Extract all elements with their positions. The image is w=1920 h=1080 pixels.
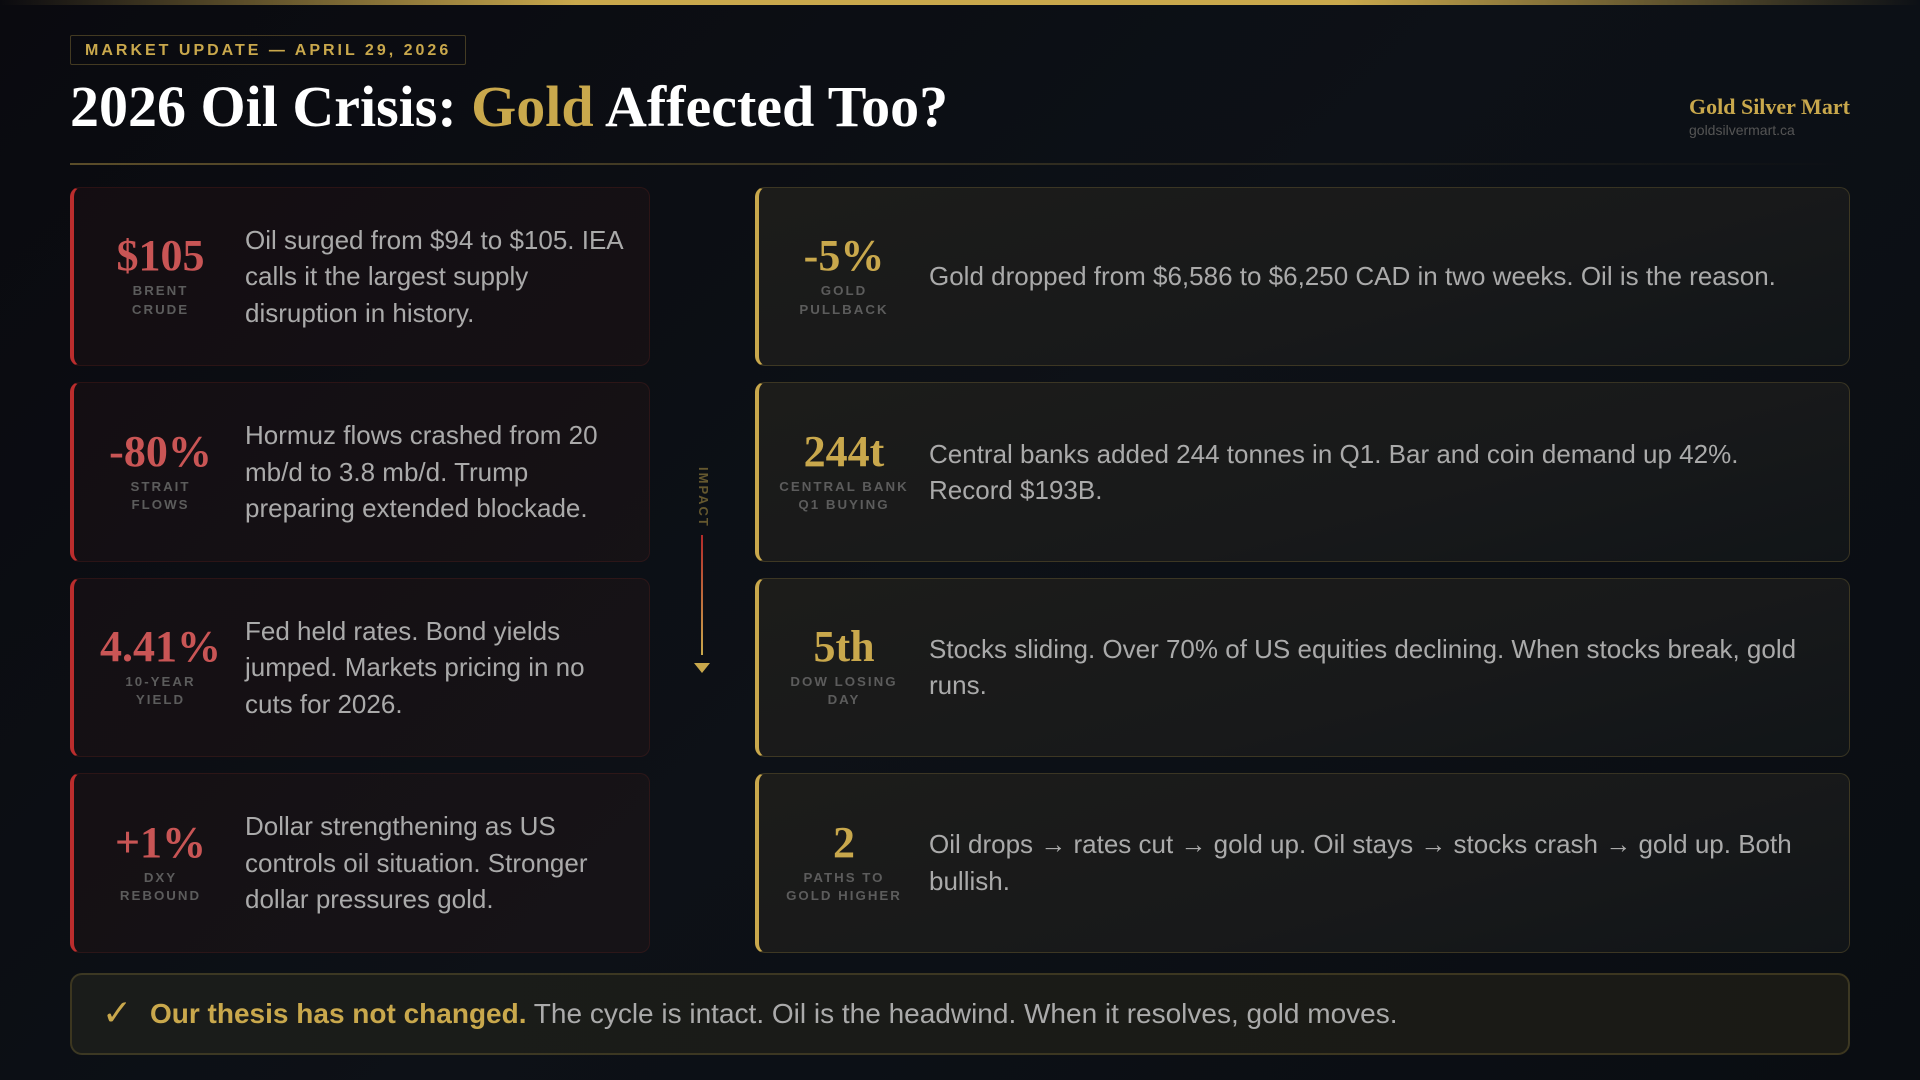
stat: 244t (779, 427, 909, 512)
stat: 244t: Q1 BUYING (798, 497, 890, 512)
panel: 10-year yield (70, 578, 650, 757)
stat: +1% (115, 818, 206, 903)
text: Hormuz: Hormuz flows crashed from 20 mb/d to 3.8 mb/d. Trump preparing extended blockade. (245, 420, 598, 523)
brand block (1689, 94, 1850, 138)
stat: $105: BRENT (133, 283, 188, 298)
stat: 4.41%: 4.41% (100, 622, 221, 671)
text: two paths: Oil drops → rates cut → gold up. Oil stays → stocks crash → gold up. Both bullish. (929, 829, 1792, 896)
stat: -80% (109, 427, 212, 512)
stat: +1%: DXY (144, 870, 177, 885)
panel: Brent crude (70, 187, 650, 366)
stat: 2: PATHS TO (803, 870, 884, 885)
panel: Dow losing day (755, 578, 1850, 757)
date tag (70, 35, 466, 65)
stat: 5th: DAY (828, 692, 860, 707)
stat: -5%: PULLBACK (799, 302, 889, 317)
panel: strait flows (70, 382, 650, 562)
stat: -5% (799, 231, 889, 317)
stat: -5%: GOLD (821, 283, 867, 298)
callout: thesis (70, 973, 1850, 1055)
stat: -80%: -80% (109, 427, 212, 476)
stat: 244t: 244t (804, 427, 884, 476)
text: central banks: Central banks added 244 tonnes in Q1. Bar and coin demand up 42%. Record $193B. (929, 439, 1738, 505)
stat: -5%: -5% (804, 231, 884, 280)
stat: +1%: +1% (115, 818, 206, 867)
stat: -80%: STRAIT (130, 479, 190, 494)
stat: 4.41% (100, 622, 221, 707)
stat: 4.41%: 10-YEAR (125, 674, 196, 689)
stat: 5th: 5th (813, 622, 875, 671)
stat: 5th: DOW LOSING (790, 674, 898, 689)
panel: gold pullback (755, 187, 1850, 366)
text: dollar: Dollar strengthening as US controls oil situation. Stronger dollar pressures gold. (245, 811, 588, 914)
stat: $105: CRUDE (132, 302, 189, 317)
date tag: MARKET UPDATE — APRIL 29, 2026 (85, 42, 451, 59)
text: gold dropped: Gold dropped from $6,586 to $6,250 CAD in two weeks. Oil is the reason. (929, 261, 1776, 291)
text: stocks: Stocks sliding. Over 70% of US equities declining. When stocks break, gold runs. (929, 634, 1796, 700)
stat: 4.41%: YIELD (136, 692, 185, 707)
top accent bar (0, 0, 1920, 5)
text: Fed: Fed held rates. Bond yields jumped. Markets pricing in no cuts for 2026. (245, 616, 585, 719)
stat: 2: 2 (833, 818, 855, 867)
stat: 2: GOLD HIGHER (786, 888, 902, 903)
arrow line (701, 535, 703, 655)
brand block: goldsilvermart.ca (1689, 122, 1795, 138)
text: oil surge: Oil surged from $94 to $105. IEA calls it the largest supply disruption in history. (245, 225, 622, 328)
brand block: Gold Silver Mart (1689, 94, 1850, 119)
stat: -80%: FLOWS (131, 497, 190, 512)
icon: check mark: ✓ (102, 993, 132, 1034)
stat: 5th (790, 622, 898, 707)
stat: $105: $105 (116, 231, 204, 280)
stat: +1%: REBOUND (120, 888, 201, 903)
title: 2026 Oil Crisis: Gold Affected Too? (70, 74, 948, 139)
stat: 244t: CENTRAL BANK (779, 479, 909, 494)
impact label: IMPACT (696, 467, 711, 528)
stat: $105 (116, 231, 204, 317)
panel: paths to gold (755, 773, 1850, 953)
panel: central bank buying (755, 382, 1850, 562)
arrow head (694, 663, 710, 673)
callout text: Our thesis has not changed. The cycle is intact. Oil is the headwind. When it resolves, gold moves. (150, 998, 1398, 1029)
stat: 2 (786, 818, 902, 903)
panel: DXY rebound (70, 773, 650, 953)
